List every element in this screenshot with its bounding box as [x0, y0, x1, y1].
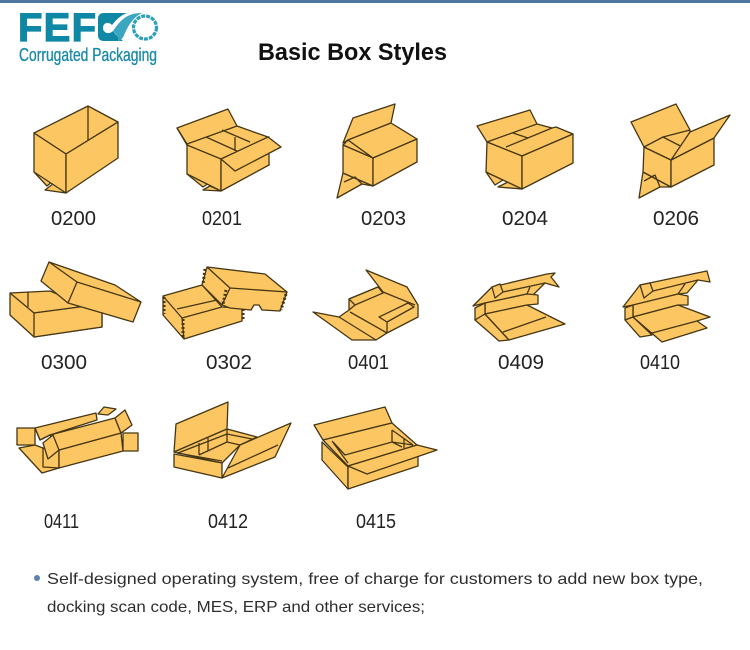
- box 0302: [163, 267, 287, 339]
- label 0401: 0401: [348, 352, 389, 374]
- label 0410: 0410: [640, 352, 680, 374]
- box 0401: [313, 270, 418, 340]
- logo: FEF: [18, 6, 96, 50]
- label 0412: 0412: [208, 511, 248, 533]
- logo: Corrugated Packaging: [19, 45, 157, 65]
- label 0200: 0200: [51, 208, 96, 230]
- box 0412: [174, 402, 291, 478]
- box 0411: [17, 407, 138, 473]
- title: Basic Box Styles: [258, 39, 447, 66]
- box 0410: [623, 271, 710, 342]
- label 0203: 0203: [361, 208, 406, 230]
- box 0206: [631, 104, 730, 198]
- box 0204: [477, 110, 573, 189]
- box 0201: [177, 109, 281, 191]
- logo: [18, 6, 157, 65]
- description text: docking scan code, MES, ERP and other services;: [47, 599, 425, 616]
- box 0203: [337, 104, 417, 198]
- box 0200: [34, 106, 118, 193]
- label 0201: 0201: [202, 208, 242, 230]
- label 0411: 0411: [44, 511, 79, 533]
- box 0409: [473, 273, 565, 341]
- label 0302: 0302: [206, 352, 252, 374]
- box 0300: [10, 262, 141, 337]
- description text: Self-designed operating system, free of charge for customers to add new box type,: [47, 571, 703, 588]
- box 0415: [314, 407, 437, 489]
- top bar: [0, 0, 750, 3]
- label 0415: 0415: [356, 511, 396, 533]
- description text: [47, 571, 703, 616]
- label 0206: 0206: [653, 208, 699, 230]
- label 0409: 0409: [498, 352, 544, 374]
- bullet: [34, 575, 40, 581]
- label 0204: 0204: [502, 208, 548, 230]
- label 0300: 0300: [41, 352, 87, 374]
